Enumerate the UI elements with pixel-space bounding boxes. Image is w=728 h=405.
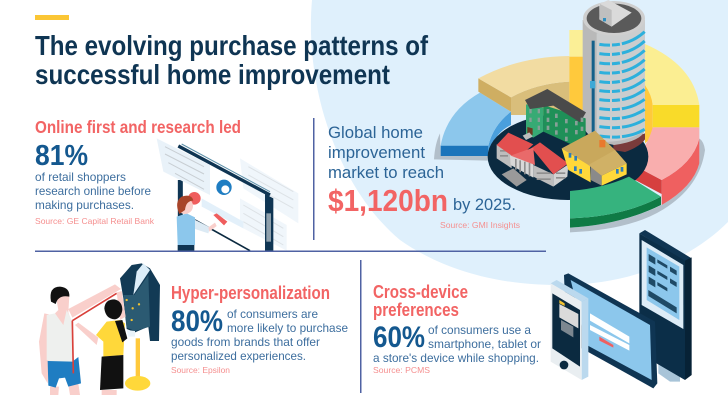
description	[35, 170, 151, 212]
pie segment: red	[629, 127, 699, 205]
stat: 80%	[171, 305, 223, 338]
pie shadow	[434, 133, 705, 232]
stat: 81%	[35, 140, 88, 172]
market source: Source: GMI Insights	[440, 220, 520, 230]
description	[373, 323, 541, 365]
description: of consumers use a	[428, 323, 531, 337]
pie segment: green	[570, 177, 661, 228]
title: The evolving purchase patterns of	[35, 30, 429, 61]
description: smartphone, tablet or	[428, 337, 541, 351]
stat: 60%	[373, 321, 425, 354]
tablet	[564, 273, 657, 388]
market text: Global home	[328, 124, 423, 142]
description: research online before	[35, 184, 151, 198]
panel: global market	[328, 124, 520, 230]
description	[171, 307, 348, 363]
description: a store's device while shopping.	[373, 351, 539, 365]
panel: cross-device	[373, 230, 692, 388]
illustration: tailor and jacket	[39, 263, 160, 395]
description: of consumers are	[227, 307, 318, 321]
market text: improvement	[328, 144, 425, 162]
heading: Hyper-personalization	[171, 282, 330, 303]
market text: by 2025.	[453, 196, 516, 214]
heading: Online first and research led	[35, 117, 241, 137]
source: Source: PCMS	[373, 365, 430, 375]
pie segment: tan	[478, 56, 569, 115]
illustration: devices	[551, 230, 692, 388]
description: personalized experiences.	[171, 349, 306, 363]
pie segment: yellow	[569, 30, 699, 143]
red-roofed building	[497, 133, 568, 187]
description: more likely to purchase	[227, 321, 348, 335]
market text: market to reach	[328, 164, 444, 182]
green building	[523, 89, 586, 146]
description: making purchases.	[35, 198, 134, 212]
tower	[583, 0, 645, 152]
title	[35, 30, 429, 90]
source: Source: Epsilon	[171, 365, 230, 375]
description: goods from brands that offer	[171, 335, 320, 349]
title: successful home improvement	[35, 59, 390, 90]
market text	[328, 124, 516, 214]
phone	[551, 280, 588, 380]
yellow house	[562, 131, 627, 186]
pie segment: blue	[441, 93, 511, 156]
source: Source: GE Capital Retail Bank	[35, 216, 155, 226]
kiosk	[639, 230, 692, 382]
market value: $1,120bn	[328, 183, 448, 218]
pie centre	[488, 113, 648, 200]
dividers	[35, 118, 546, 393]
illustration: tablet research	[157, 138, 298, 251]
background circle	[311, 0, 728, 285]
buildings	[497, 89, 627, 187]
heading: preferences	[373, 299, 459, 320]
panel: hyper-personalization	[39, 263, 348, 395]
illustration: pie chart with buildings	[434, 0, 705, 232]
heading: Cross-device	[373, 281, 468, 302]
panel: online first	[35, 117, 298, 251]
description: of retail shoppers	[35, 170, 126, 184]
heading	[373, 281, 468, 320]
accent bar	[35, 15, 69, 20]
